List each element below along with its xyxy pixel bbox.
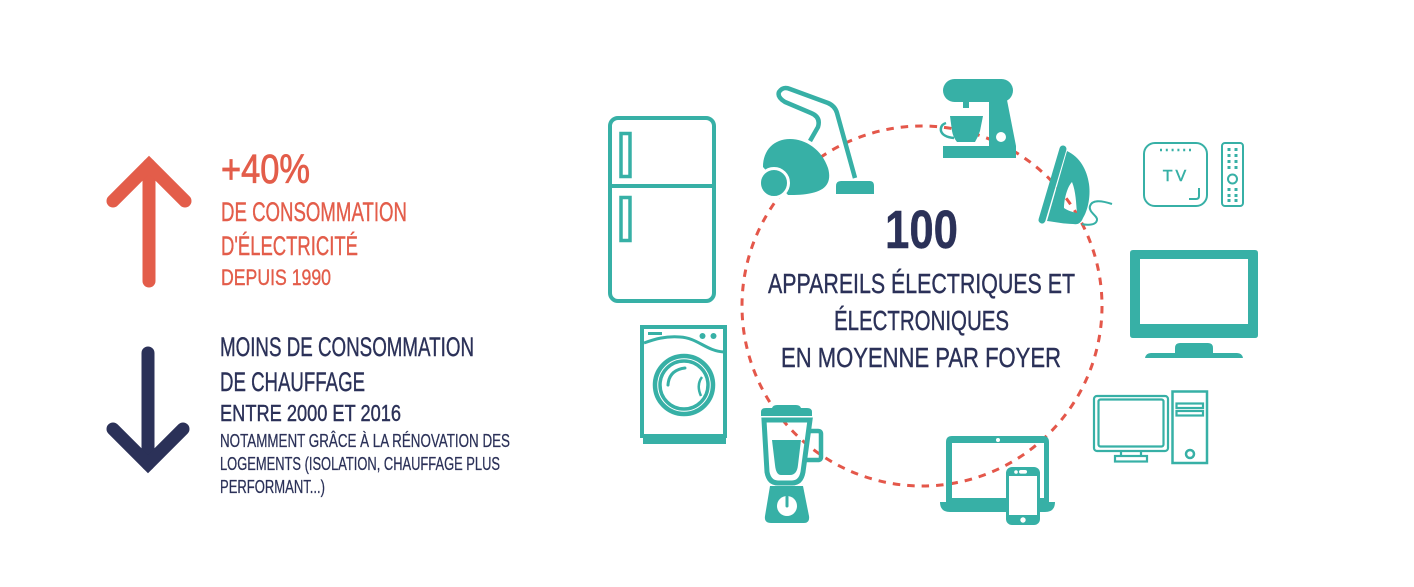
panel: electricity increase — [113, 146, 407, 290]
text: appliances per household — [768, 268, 1075, 373]
icon: flat screen TV — [1130, 250, 1258, 358]
icon: stand mixer — [941, 79, 1016, 158]
icon: TV box and remote: TV — [1163, 168, 1189, 185]
dashed circle — [742, 126, 1102, 486]
text: renovation note: LOGEMENTS (ISOLATION, CHAUFFAGE PLUS — [220, 454, 500, 474]
text: appliances per household: APPAREILS ÉLECTRIQUES ET — [768, 268, 1075, 299]
text: electricity consumption — [221, 197, 407, 290]
text: heating consumption: MOINS DE CONSOMMATION — [220, 332, 474, 362]
text: appliances per household: ÉLECTRONIQUES — [834, 305, 1009, 336]
text: renovation note: NOTAMMENT GRÂCE À LA RÉNOVATION DES — [220, 431, 510, 451]
icon: down arrow — [113, 353, 183, 464]
icon: washing machine — [642, 327, 725, 442]
icon: up arrow — [113, 165, 185, 281]
icon: vacuum cleaner — [760, 88, 874, 198]
stat: 100: 100 — [885, 200, 958, 260]
icon: laptop and phone — [940, 436, 1055, 525]
panel: center text — [768, 200, 1075, 373]
icon: blender — [761, 405, 821, 523]
text: renovation note: PERFORMANT...) — [220, 477, 325, 497]
text: appliances per household: EN MOYENNE PAR FOYER — [781, 342, 1061, 373]
icon: TV box and remote — [1144, 143, 1243, 206]
icon: iron — [1042, 149, 1112, 225]
icon: fridge — [610, 118, 714, 301]
text: electricity consumption: DEPUIS 1990 — [221, 265, 331, 290]
text: heating consumption — [220, 332, 474, 426]
text: electricity consumption: DE CONSOMMATION — [221, 197, 407, 227]
text: renovation note — [220, 431, 510, 497]
icon: desktop computer — [1094, 392, 1207, 463]
text: electricity consumption: D'ÉLECTRICITÉ — [221, 231, 358, 261]
stat: +40%: +40% — [221, 146, 310, 192]
panel: heating decrease — [113, 332, 510, 497]
text: heating consumption: ENTRE 2000 ET 2016 — [220, 400, 401, 426]
text: heating consumption: DE CHAUFFAGE — [220, 367, 365, 397]
